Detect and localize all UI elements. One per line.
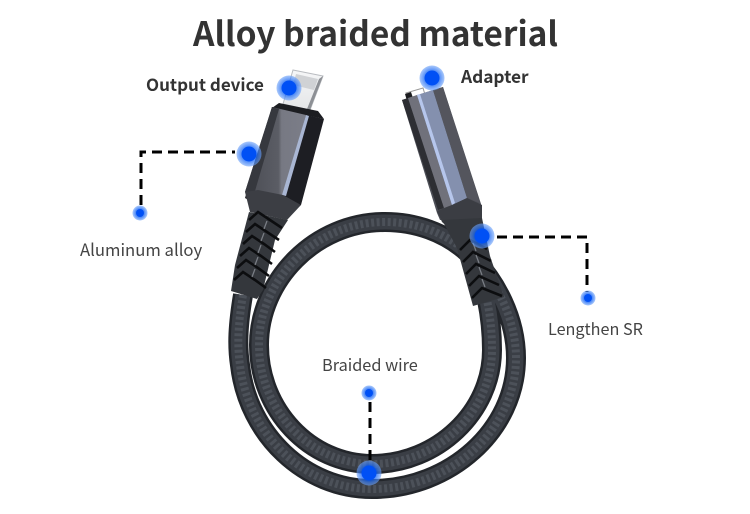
marker: aluminum body bbox=[236, 142, 262, 166]
marker: adapter bbox=[420, 66, 444, 90]
marker: aluminum alloy label dot bbox=[132, 206, 148, 220]
left strain relief bbox=[231, 212, 288, 299]
label: lengthen SR: Lengthen SR bbox=[548, 316, 643, 340]
left connector aluminum body bbox=[245, 107, 324, 220]
right strain relief bbox=[442, 218, 504, 306]
dashed leader: braided wire bbox=[368, 402, 372, 468]
label: adapter: Adapter bbox=[460, 63, 529, 88]
dashed leader: lengthen SR bbox=[497, 237, 587, 292]
right connector: adapter bbox=[402, 87, 504, 306]
label: braided wire: Braided wire bbox=[322, 352, 418, 376]
adapter tip bbox=[405, 88, 426, 102]
dashed leader: aluminum alloy bbox=[141, 152, 235, 205]
label: output device: Output device bbox=[146, 71, 264, 96]
title: Alloy braided material bbox=[192, 7, 558, 56]
left connector collar bbox=[272, 103, 324, 119]
marker: output device bbox=[276, 76, 302, 100]
marker: strain relief bbox=[470, 224, 494, 248]
marker: braided wire label dot bbox=[362, 386, 376, 400]
label: aluminum alloy: Aluminum alloy bbox=[80, 237, 202, 261]
marker: lengthen SR label dot bbox=[580, 290, 596, 306]
adapter aluminum body bbox=[402, 87, 482, 240]
left connector: lightning plug bbox=[231, 70, 324, 299]
marker: cable bbox=[356, 460, 382, 486]
braided cable bbox=[238, 222, 516, 489]
lightning plug tip bbox=[283, 70, 323, 110]
